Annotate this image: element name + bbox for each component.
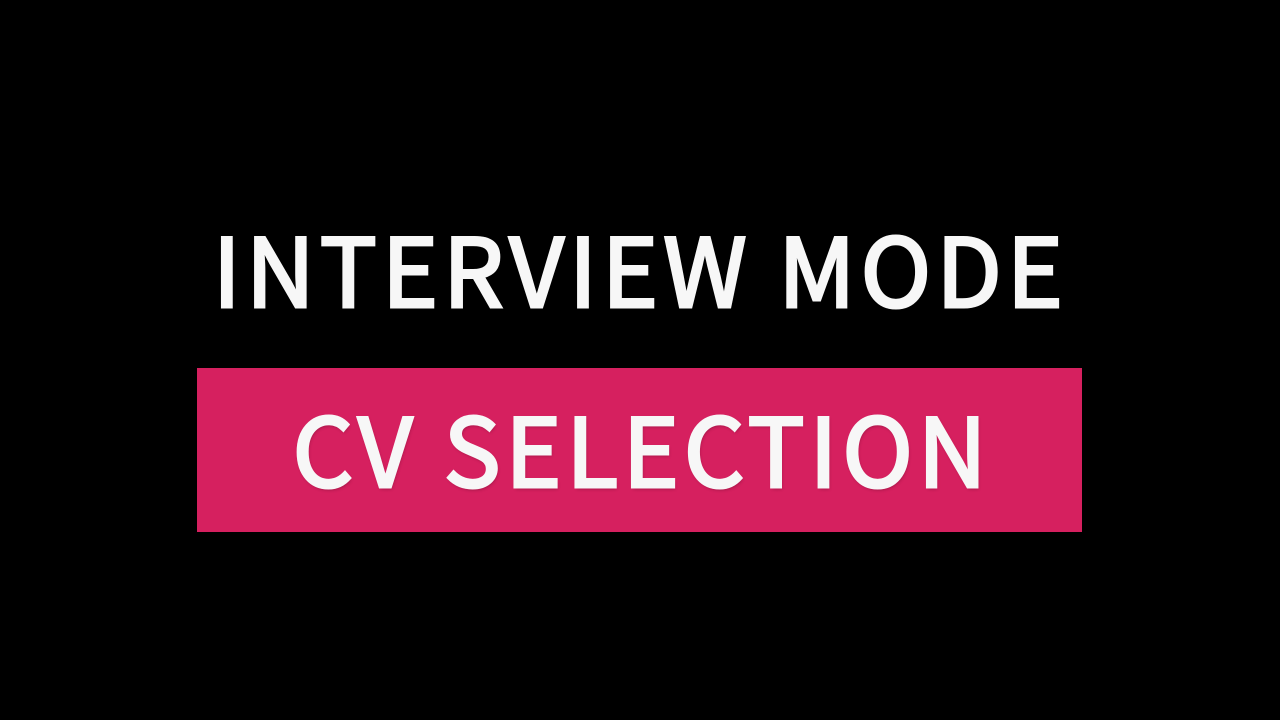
title: interview mode: INTERVIEW MODE [213,198,1068,335]
banner: cv selection [197,368,1082,532]
banner text: CV SELECTION [293,378,992,515]
